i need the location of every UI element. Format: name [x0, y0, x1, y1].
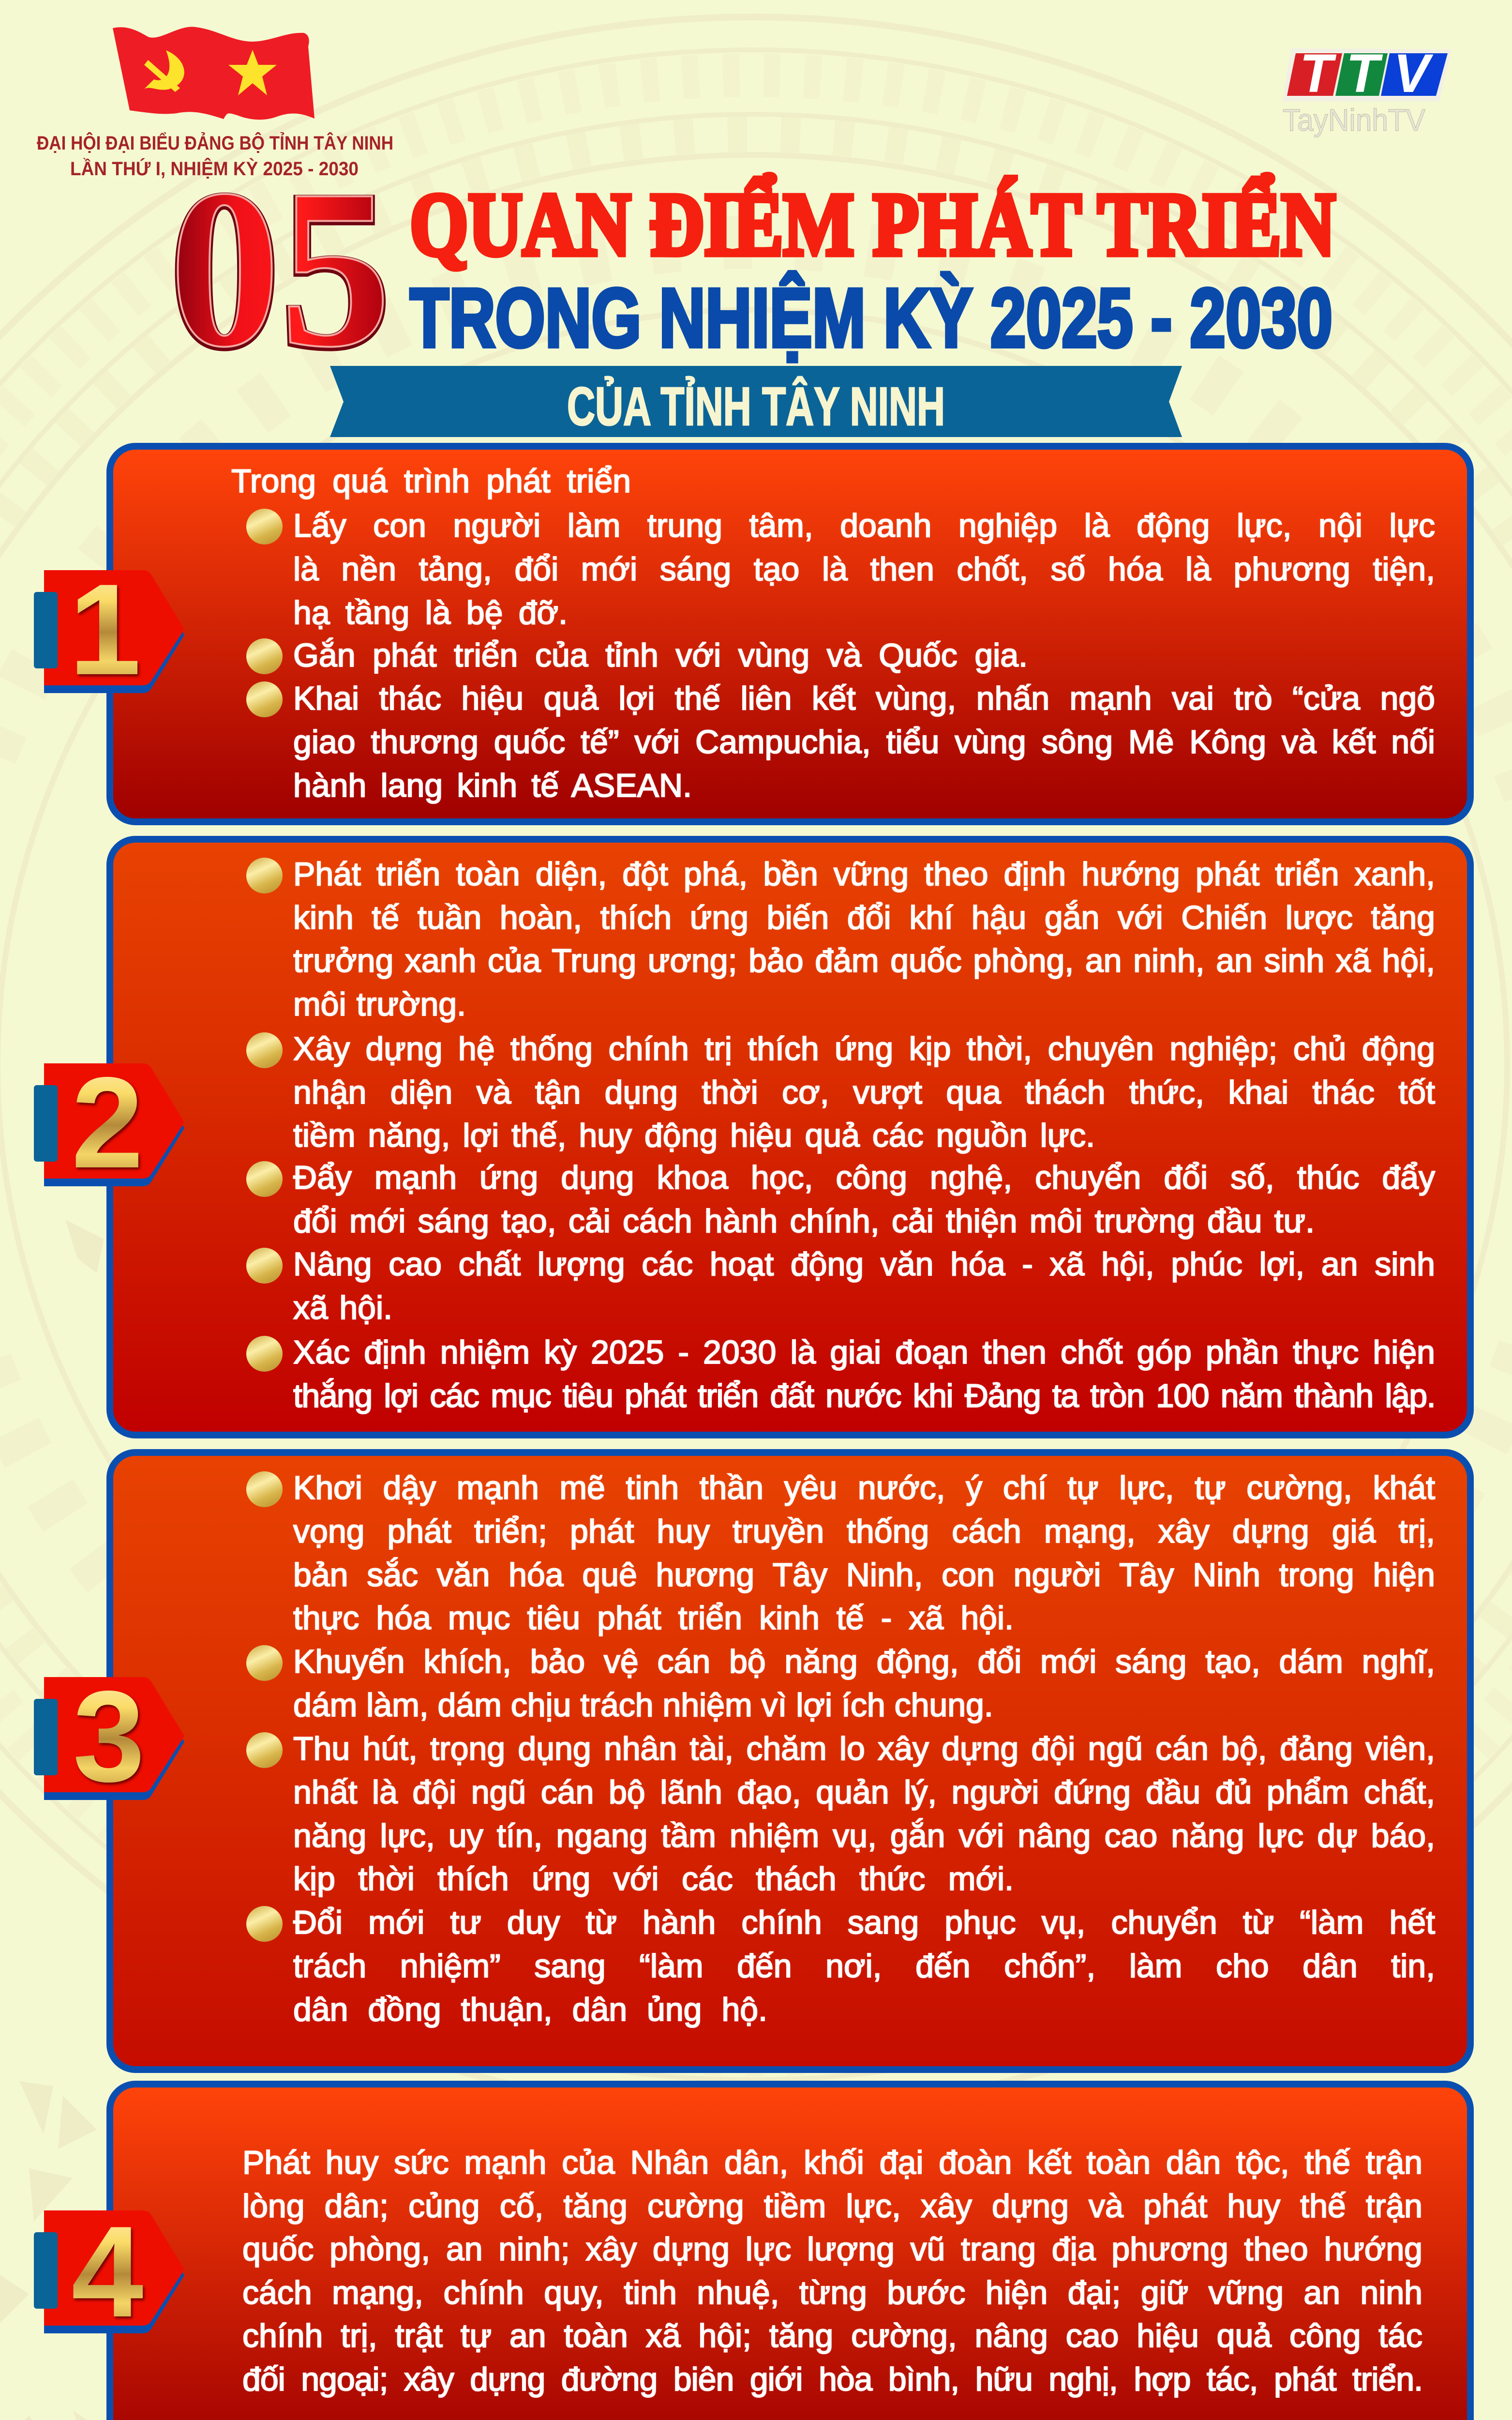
body text: Phát huy sức mạnh của Nhân dân, khối đại đoàn kết toàn dân tộc, thế trận [242, 2144, 1422, 2181]
bullet 3.1: bản sắc văn hóa quê hương Tây Ninh, con người Tây Ninh trong hiện [293, 1557, 1435, 1593]
bullet 3.4: trách nhiệm” sang “làm đến nơi, đến chốn”, làm cho dân tin, [293, 1948, 1435, 1984]
bullet 1.3: hành lang kinh tế ASEAN. [293, 767, 692, 804]
bullet 3.1 [246, 1467, 1435, 1640]
bullet 2.2: Xây dựng hệ thống chính trị thích ứng kịp thời, chuyên nghiệp; chủ động [293, 1030, 1435, 1067]
subtitle banner [330, 366, 1182, 437]
bullet 2.2: tiềm năng, lợi thế, huy động hiệu quả các nguồn lực. [293, 1117, 1095, 1154]
bullet 2.3 [246, 1156, 1435, 1243]
bullet 3.3: năng lực, uy tín, ngang tầm nhiệm vụ, gắn với nâng cao năng lực dự báo, [293, 1817, 1435, 1854]
TTV logo: TayNinhTV [1283, 103, 1425, 137]
panel 4 [34, 2081, 1474, 2420]
bullet 2.1: Phát triển toàn diện, đột phá, bền vững theo định hướng phát triển xanh, [293, 856, 1435, 892]
body text: chính trị, trật tự an toàn xã hội; tăng cường, nâng cao hiệu quả công tác [242, 2317, 1422, 2354]
bullet 3.1: thực hóa mục tiêu phát triển kinh tế - xã hội. [293, 1600, 1014, 1636]
subtitle banner: CỦA TỈNH TÂY NINH [567, 376, 945, 437]
bullet 1.3: giao thương quốc tế” với Campuchia, tiểu vùng sông Mê Kông và kết nối [293, 724, 1435, 760]
number badge 2 [34, 1062, 189, 1193]
number badge 4: 4 [71, 2199, 144, 2344]
TTV logo: V [1393, 44, 1434, 104]
body text: quốc phòng, an ninh; xây dựng lực lượng vũ trang địa phương theo hướng [242, 2231, 1422, 2268]
bullet 3.3: kịp thời thích ứng với các thách thức mới. [293, 1860, 1014, 1897]
number badge 2: 2 [71, 1050, 144, 1195]
panel 1 [34, 443, 1474, 825]
number badge 3 [34, 1676, 189, 1806]
bullet 2.5: Xác định nhiệm kỳ 2025 - 2030 là giai đoạn then chốt góp phần thực hiện [293, 1334, 1435, 1371]
TTV logo: T [1346, 44, 1383, 104]
bullet 2.4: Nâng cao chất lượng các hoạt động văn hóa - xã hội, phúc lợi, an sinh [293, 1246, 1435, 1283]
intro text: Trong quá trình phát triển [231, 463, 631, 499]
bullet 1.2: Gắn phát triển của tỉnh với vùng và Quốc gia. [293, 637, 1028, 674]
congress caption: ĐẠI HỘI ĐẠI BIỂU ĐẢNG BỘ TỈNH TÂY NINH [37, 131, 393, 154]
bullet 3.1: vọng phát triển; phát huy truyền thống cách mạng, xây dựng giá trị, [293, 1513, 1435, 1550]
bullet 2.1: môi trường. [293, 986, 466, 1023]
bullet 2.5: thắng lợi các mục tiêu phát triển đất nước khi Đảng ta tròn 100 năm thành lập. [293, 1377, 1435, 1414]
bullet 3.4 [246, 1901, 1435, 2031]
bullet 2.4 [246, 1243, 1435, 1330]
bullet 1.1 [246, 507, 1435, 632]
congress caption [37, 131, 393, 180]
bullet 2.2 [246, 1028, 1435, 1158]
bullet 1.1: là nền tảng, đổi mới sáng tạo là then chốt, số hóa là phương tiện, [293, 551, 1435, 588]
panel 2 [34, 836, 1474, 1438]
bullet 2.3: đổi mới sáng tạo, cải cách hành chính, cải thiện môi trường đầu tư. [293, 1203, 1315, 1240]
bullet 2.1: trưởng xanh của Trung ương; bảo đảm quốc phòng, an ninh, an sinh xã hội, [293, 942, 1435, 979]
number badge 1: 1 [69, 557, 141, 702]
TTV logo [1283, 44, 1452, 137]
bullet 3.1: Khơi dậy mạnh mẽ tinh thần yêu nước, ý chí tự lực, tự cường, khát [293, 1469, 1435, 1506]
bullet 1.2 [246, 634, 1435, 677]
number badge 3: 3 [73, 1664, 145, 1809]
bullet 3.3 [246, 1727, 1435, 1901]
bullet 3.3: Thu hút, trọng dụng nhân tài, chăm lo xây dựng đội ngũ cán bộ, đảng viên, [293, 1730, 1435, 1767]
body text [242, 2141, 1422, 2402]
panel 3 [34, 1449, 1474, 2073]
bullet 2.1 [246, 853, 1435, 1026]
bullet 3.3: nhất là đội ngũ cán bộ lãnh đạo, quản lý, người đứng đầu đủ phẩm chất, [293, 1774, 1435, 1811]
body text: cách mạng, chính quy, tinh nhuệ, từng bước hiện đại; giữ vững an ninh [242, 2274, 1422, 2311]
bullet 2.4: xã hội. [293, 1289, 392, 1326]
header: party flag and congress caption [37, 27, 393, 180]
icon: party flag [113, 27, 314, 120]
number badge 4 [34, 2209, 189, 2340]
TTV logo: T [1300, 44, 1337, 104]
bullet 2.3: Đẩy mạnh ứng dụng khoa học, công nghệ, chuyển đổi số, thúc đẩy [293, 1159, 1435, 1196]
body text: lòng dân; củng cố, tăng cường tiềm lực, xây dựng và phát huy thế trận [242, 2188, 1422, 2224]
bullet 1.3: Khai thác hiệu quả lợi thế liên kết vùng, nhấn mạnh vai trò “cửa ngõ [293, 680, 1435, 717]
bullet 3.4: Đổi mới tư duy từ hành chính sang phục vụ, chuyển từ “làm hết [293, 1904, 1435, 1941]
bullet 3.4: dân đồng thuận, dân ủng hộ. [293, 1991, 767, 2028]
number badge 1 [34, 557, 184, 702]
congress caption: LẦN THỨ I, NHIỆM KỲ 2025 - 2030 [70, 157, 359, 180]
bullet 1.3 [246, 677, 1435, 807]
title [169, 165, 1337, 368]
bullet 2.2: nhận diện và tận dụng thời cơ, vượt qua thách thức, khai thác tốt [293, 1074, 1435, 1111]
bullet 2.1: kinh tế tuần hoàn, thích ứng biến đổi khí hậu gắn với Chiến lược tăng [293, 899, 1435, 936]
body text: đối ngoại; xây dựng đường biên giới hòa bình, hữu nghị, hợp tác, phát triển. [242, 2361, 1422, 2398]
bullet 3.2: dám làm, dám chịu trách nhiệm vì lợi ích chung. [293, 1687, 993, 1724]
bullet 2.5 [246, 1331, 1435, 1418]
bullet 1.1: hạ tầng là bệ đỡ. [293, 594, 568, 631]
bullet 1.1: Lấy con người làm trung tâm, doanh nghiệp là động lực, nội lực [293, 507, 1435, 544]
bullet 3.2 [246, 1640, 1435, 1727]
bullet 3.2: Khuyến khích, bảo vệ cán bộ năng động, đổi mới sáng tạo, dám nghĩ, [293, 1643, 1435, 1680]
